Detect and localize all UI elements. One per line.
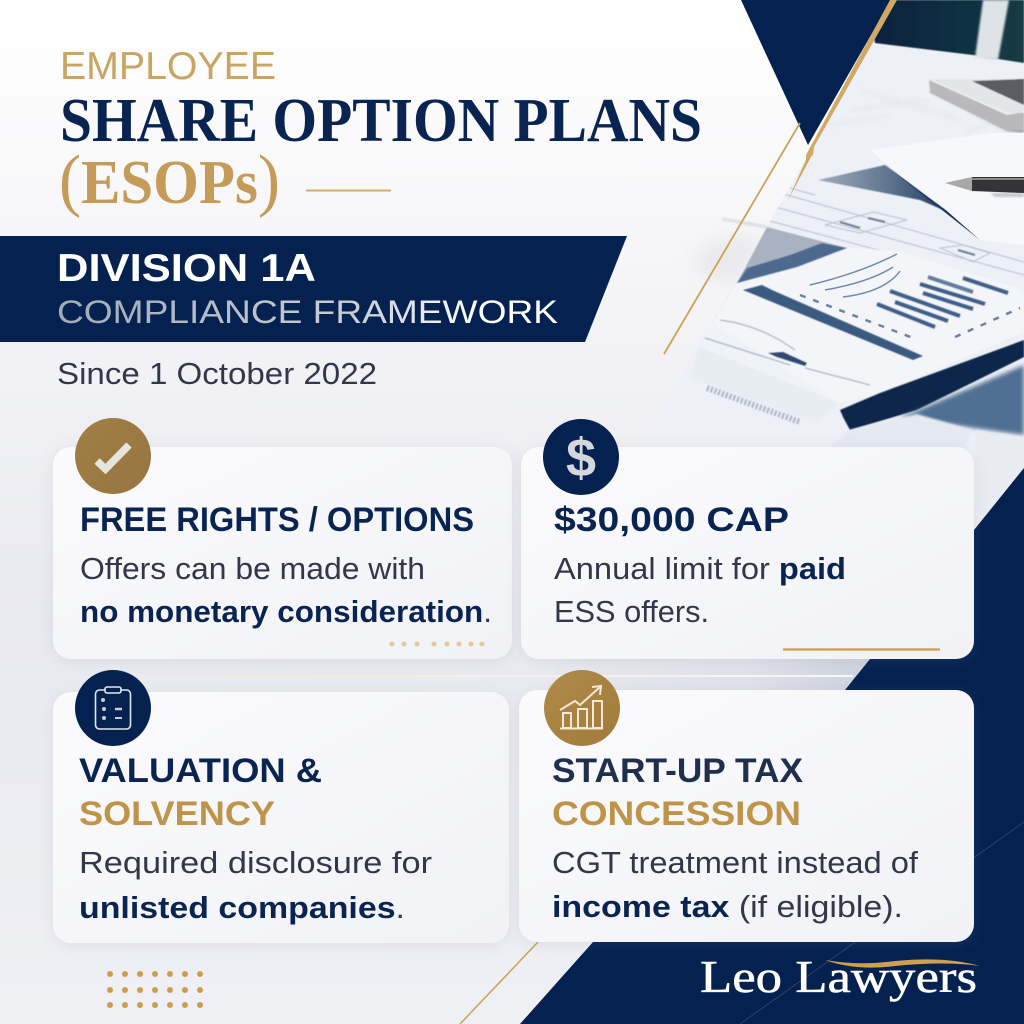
body emphasis: income tax (if eligible).: [552, 889, 903, 924]
navy corner shape: [520, 468, 1024, 1024]
title: ESOPs: (ESOPs): [59, 142, 280, 219]
dark room background: [870, 0, 1024, 63]
body: Required disclosure for: [79, 845, 432, 880]
icon: growth chart: [544, 670, 620, 746]
banner: division 1A: [0, 236, 627, 342]
main report sheet: [872, 249, 961, 273]
icon: clipboard: [75, 670, 151, 746]
panel: 30000 cap: [521, 419, 974, 659]
gold dot grid: [107, 971, 203, 1008]
heading gold: SOLVENCY: [79, 795, 275, 833]
report bar chart: [877, 277, 1008, 327]
lower sheet: [700, 320, 873, 403]
icon: check mark: [75, 418, 151, 494]
logo swoosh: [825, 959, 980, 968]
card: [53, 692, 509, 943]
faint diagonal on navy: [740, 822, 1024, 1024]
pale sheet under pen: [870, 133, 1024, 245]
pen: [945, 177, 1024, 197]
bottom sheet: [850, 412, 972, 430]
banner shape: [0, 236, 627, 342]
title: share option plans: SHARE OPTION PLANS: [60, 87, 702, 155]
gold accent line long: [664, 123, 800, 354]
gold accent line upper: [806, 0, 897, 160]
soft shadow smudge on white panel: [690, 219, 767, 283]
pie wedge: [737, 227, 847, 283]
heading: START-UP TAX: [552, 752, 803, 790]
decorative dots: [390, 642, 484, 646]
icon: dollar: $: [566, 428, 596, 488]
lower sheet marker: [768, 352, 807, 366]
dark header bar of report: [743, 285, 923, 360]
report line chart: [810, 254, 900, 297]
table surface streaks: [830, 90, 990, 132]
gold accent segment: [788, 155, 812, 200]
window strip: [975, 0, 1009, 60]
right table area: [975, 429, 1022, 438]
heading: FREE RIGHTS / OPTIONS: [80, 501, 474, 539]
body: Offers can be made with: [80, 551, 425, 586]
soft grey band behind lower cards: [540, 659, 880, 700]
body second line: ESS offers.: [554, 594, 709, 629]
icon: dollar: [543, 419, 619, 495]
logo wordmark: Leo Lawyers: [700, 951, 977, 1002]
black folder edge: [840, 340, 1024, 430]
heading: VALUATION &: [79, 752, 322, 790]
gold rule beside title: [306, 190, 391, 192]
report dotted rows: [800, 295, 1020, 338]
body emphasis: no monetary consideration.: [80, 594, 492, 629]
banner subheading: COMPLIANCE FRAMEWORK: [57, 294, 558, 330]
card: [521, 447, 974, 659]
card: [53, 447, 512, 659]
heading: $30,000 CAP: [554, 501, 789, 539]
title: employee: EMPLOYEE: [60, 45, 276, 88]
faint horizontal divider: [115, 675, 853, 677]
blue surface: [900, 365, 1024, 435]
third sheet: [690, 347, 840, 423]
banner heading: DIVISION 1A: [57, 247, 316, 290]
panel: valuation and solvency: [53, 670, 509, 943]
heading gold: CONCESSION: [552, 795, 801, 833]
gold rule: [783, 648, 940, 651]
phone: [929, 79, 1024, 133]
body: CGT treatment instead of: [552, 845, 918, 880]
panel: start-up tax concession: [519, 670, 974, 942]
lower sheet sketches: [705, 320, 870, 422]
table line sketches: [770, 188, 1024, 275]
date line: Since 1 October 2022: [57, 356, 377, 391]
body emphasis: unlisted companies .: [79, 890, 405, 925]
navy triangle top: [741, 0, 891, 145]
body: Annual limit for paid: [554, 551, 846, 586]
card: [519, 690, 974, 942]
gold accent line bottom: [460, 942, 538, 1024]
dark triangle on paper: [818, 165, 948, 212]
photo: desk with financial documents: [691, 0, 1024, 446]
navy spike: [885, 165, 980, 240]
panel: free rights: [53, 418, 512, 659]
logo: Leo Lawyers: [700, 951, 980, 1002]
